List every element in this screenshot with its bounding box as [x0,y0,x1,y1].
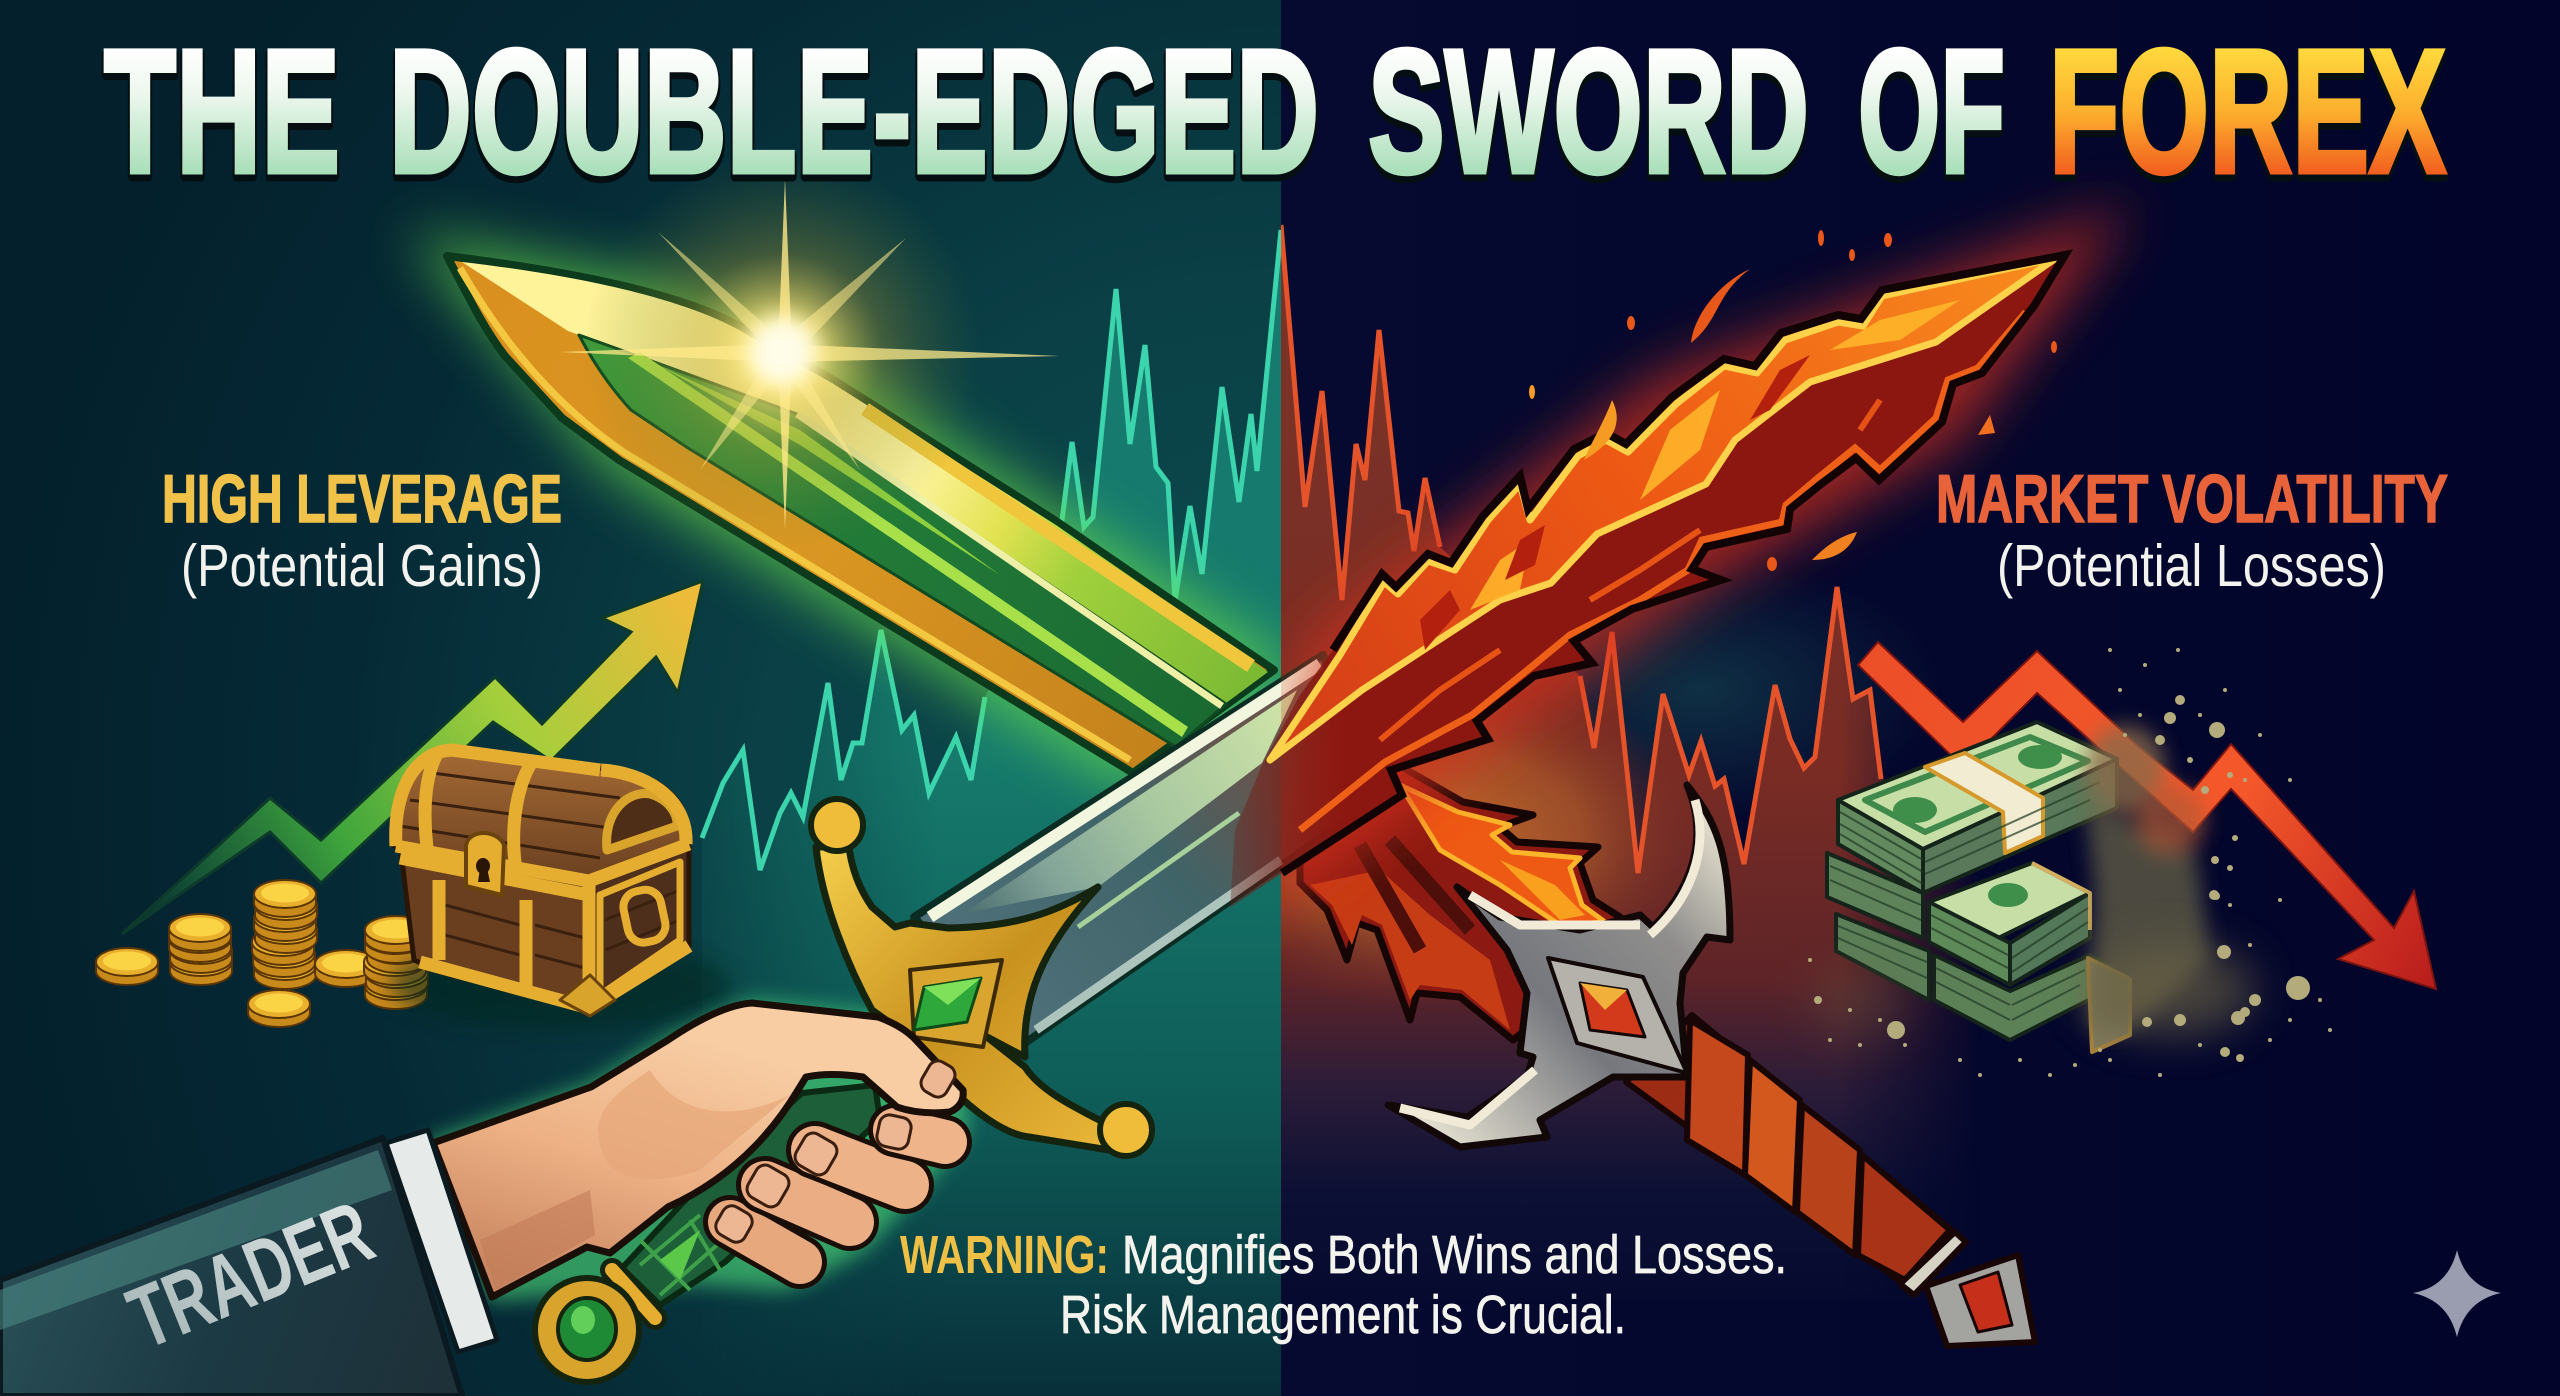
coin stack 1 [96,948,158,985]
sword 2: pommel ring [535,1270,655,1382]
flame glow [1282,255,2065,873]
flame lower rim [1300,312,2026,830]
sword 1 pommel collar [1900,1232,1966,1295]
flame dark body [1230,255,2065,908]
sword 2: steel blade [914,655,1380,1043]
blade body with gold lower edge [447,256,1274,773]
steel lower pale stripe [1036,860,1281,1030]
coin stack 3 [252,880,317,989]
finger 4 [730,1222,800,1262]
finger 3 [765,1185,850,1222]
chest lid [393,750,689,881]
chest body side [589,844,689,1010]
icon: starburst glint [560,152,1060,552]
finger 1 [895,1130,945,1142]
title shadow: DOUBLE-EDGED [389,18,1319,214]
label: high leverage: (Potential Gains) [181,533,543,599]
label: high leverage: HIGH LEVERAGE [162,461,562,537]
note edge lines [1830,782,2100,1020]
icon: dissolving cash stacks [1808,648,2332,1077]
stack upper [1923,759,2117,893]
coin single low [248,990,310,1027]
title [104,14,2446,210]
warning callout: WARNING: [900,1225,1109,1285]
icon: suit sleeve [0,1130,497,1396]
crossguard upper knob [811,799,863,851]
icon: treasure chest [390,750,730,1030]
icon: hand gripping sword [433,1003,963,1297]
label: high leverage [162,461,562,599]
sword 1: golden-green blade half [447,256,1274,773]
flame black outline [1282,255,2065,873]
icon: sparkle watermark [2413,1250,2501,1337]
chart: red volatility lines [1281,225,1881,873]
arrow: rising gains arrow [122,581,703,934]
sword 2: green handle [622,1085,880,1305]
label: market volatility: (Potential Losses) [1997,533,2386,599]
stack bottom [1934,955,2130,1040]
title: OF [1858,14,2005,210]
label: trader: TRADER [115,1181,386,1368]
crossguard light edges [1400,800,1700,1125]
title shadow: SWORD [1368,18,1809,214]
sword 2: gold crossguard [811,799,1152,1156]
palm and thumb [433,1003,963,1297]
blade top gold strip [865,409,1251,666]
crossguard hub [910,960,1002,1047]
palm shading [480,1190,595,1290]
sword 2: flame blade [1230,255,2065,908]
crossguard lower knob [1100,1104,1152,1156]
blade pale line [797,414,1222,706]
fingernails [712,1057,959,1246]
lower flame orange [1400,785,1605,925]
steel upper light band [964,690,1297,913]
lower gold rim [460,268,1130,760]
finger 2 [815,1150,905,1185]
label: market volatility [1936,461,2448,599]
hand glow [433,1003,963,1297]
coin stack 4 [364,916,429,1009]
sword 1 pommel [1926,1255,2035,1346]
flame red patches [1420,355,1810,650]
chest handle [620,887,668,946]
title: THE [104,14,340,210]
warning callout: Risk Management is Crucial. [1060,1285,1626,1345]
title: SWORD [1368,14,1809,210]
chest corner [560,975,615,1016]
sword 1 pommel gem [1960,1272,2012,1332]
dust cloud [1810,725,2255,1040]
crossguard gem [1580,983,1645,1037]
icon: coin stacks [96,880,429,1027]
flame orange region with yellow rim [1270,258,2056,760]
warning callout: Magnifies Both Wins and Losses. [1122,1225,1787,1285]
sword 1: silver crossguard [1388,785,1730,1147]
chest body front [400,844,589,1010]
blade green fuller [579,335,1226,747]
paper strap [1925,753,2043,853]
shirt cuff [386,1130,497,1352]
title shadow [104,18,2446,214]
dust particles [1808,648,2332,1077]
title: DOUBLE-EDGED [389,14,1319,210]
title shadow: THE [104,18,340,214]
coin half hidden [315,950,377,987]
coin stack 2 [169,914,232,985]
flame veins [1380,400,1880,740]
chest lid arch [607,793,677,850]
warning callout [900,1225,1787,1345]
steel white edge [930,664,1320,917]
chest planks [400,772,680,968]
green-side blade glow [447,256,1274,773]
crossguard green gem [914,978,981,1030]
crossguard hub [1548,958,1687,1073]
arrow: falling losses arrow [1858,642,2436,989]
sword 1: flame blade lower half [1300,690,1620,1040]
flame inner yellow licks [1470,300,1960,610]
sleeve body [0,1138,462,1396]
flame sparks [1529,230,2057,571]
background: split teal and navy panels [0,0,1969,1396]
stack lower-left [1836,914,1929,1000]
title shadow: OF [1858,18,2005,214]
chart: teal volatility lines [702,230,1281,870]
sword 1: red wrapped handle [1626,1015,2035,1346]
chest lock [466,833,504,895]
steel mid line [1078,813,1239,927]
blade lime highlight [628,352,1188,737]
stack middle [1929,863,2090,942]
blade upper bright band [462,262,1268,706]
